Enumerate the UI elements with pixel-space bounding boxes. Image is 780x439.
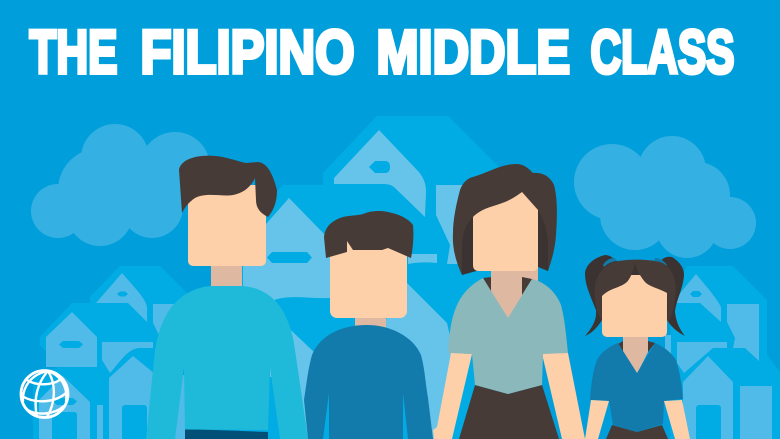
girl skirt xyxy=(606,425,668,439)
boy face xyxy=(330,236,407,318)
boy neck xyxy=(355,312,386,330)
woman skirt xyxy=(459,385,559,439)
title: THE xyxy=(30,18,118,86)
woman hair shadow xyxy=(462,210,548,275)
girl hair ties xyxy=(603,258,667,267)
man face xyxy=(188,185,266,266)
man hair xyxy=(179,156,277,217)
woman hair back xyxy=(453,164,557,275)
boy hair xyxy=(324,211,413,258)
woman left arm xyxy=(433,353,472,439)
boy sweater xyxy=(304,325,433,439)
houses right cluster xyxy=(665,266,780,439)
title: MIDDLE xyxy=(376,18,570,86)
person: woman xyxy=(433,164,585,439)
cloud right xyxy=(574,136,756,258)
houses left cluster xyxy=(33,266,192,439)
woman face xyxy=(473,192,538,271)
girl hair cap xyxy=(595,260,676,322)
girl pigtails xyxy=(585,255,685,336)
cloud left xyxy=(31,124,210,246)
woman right arm xyxy=(543,353,585,439)
girl left arm xyxy=(585,400,609,439)
title: FILIPINO xyxy=(140,18,354,86)
title xyxy=(30,18,734,86)
girl neck xyxy=(623,332,648,374)
man sweater xyxy=(146,286,308,439)
woman shirt xyxy=(448,278,568,394)
person: man xyxy=(146,156,308,439)
girl face xyxy=(602,275,667,337)
houses centre cluster xyxy=(172,116,510,439)
icon: World Bank globe logo xyxy=(21,370,68,418)
woman collar xyxy=(483,277,532,295)
girl shirt xyxy=(590,343,683,432)
girl right arm xyxy=(664,400,690,439)
person: girl xyxy=(585,255,690,439)
man belt xyxy=(185,429,268,439)
girl collar xyxy=(618,341,655,352)
man neck xyxy=(211,260,242,292)
woman neck xyxy=(491,265,538,320)
person: boy xyxy=(304,211,433,439)
